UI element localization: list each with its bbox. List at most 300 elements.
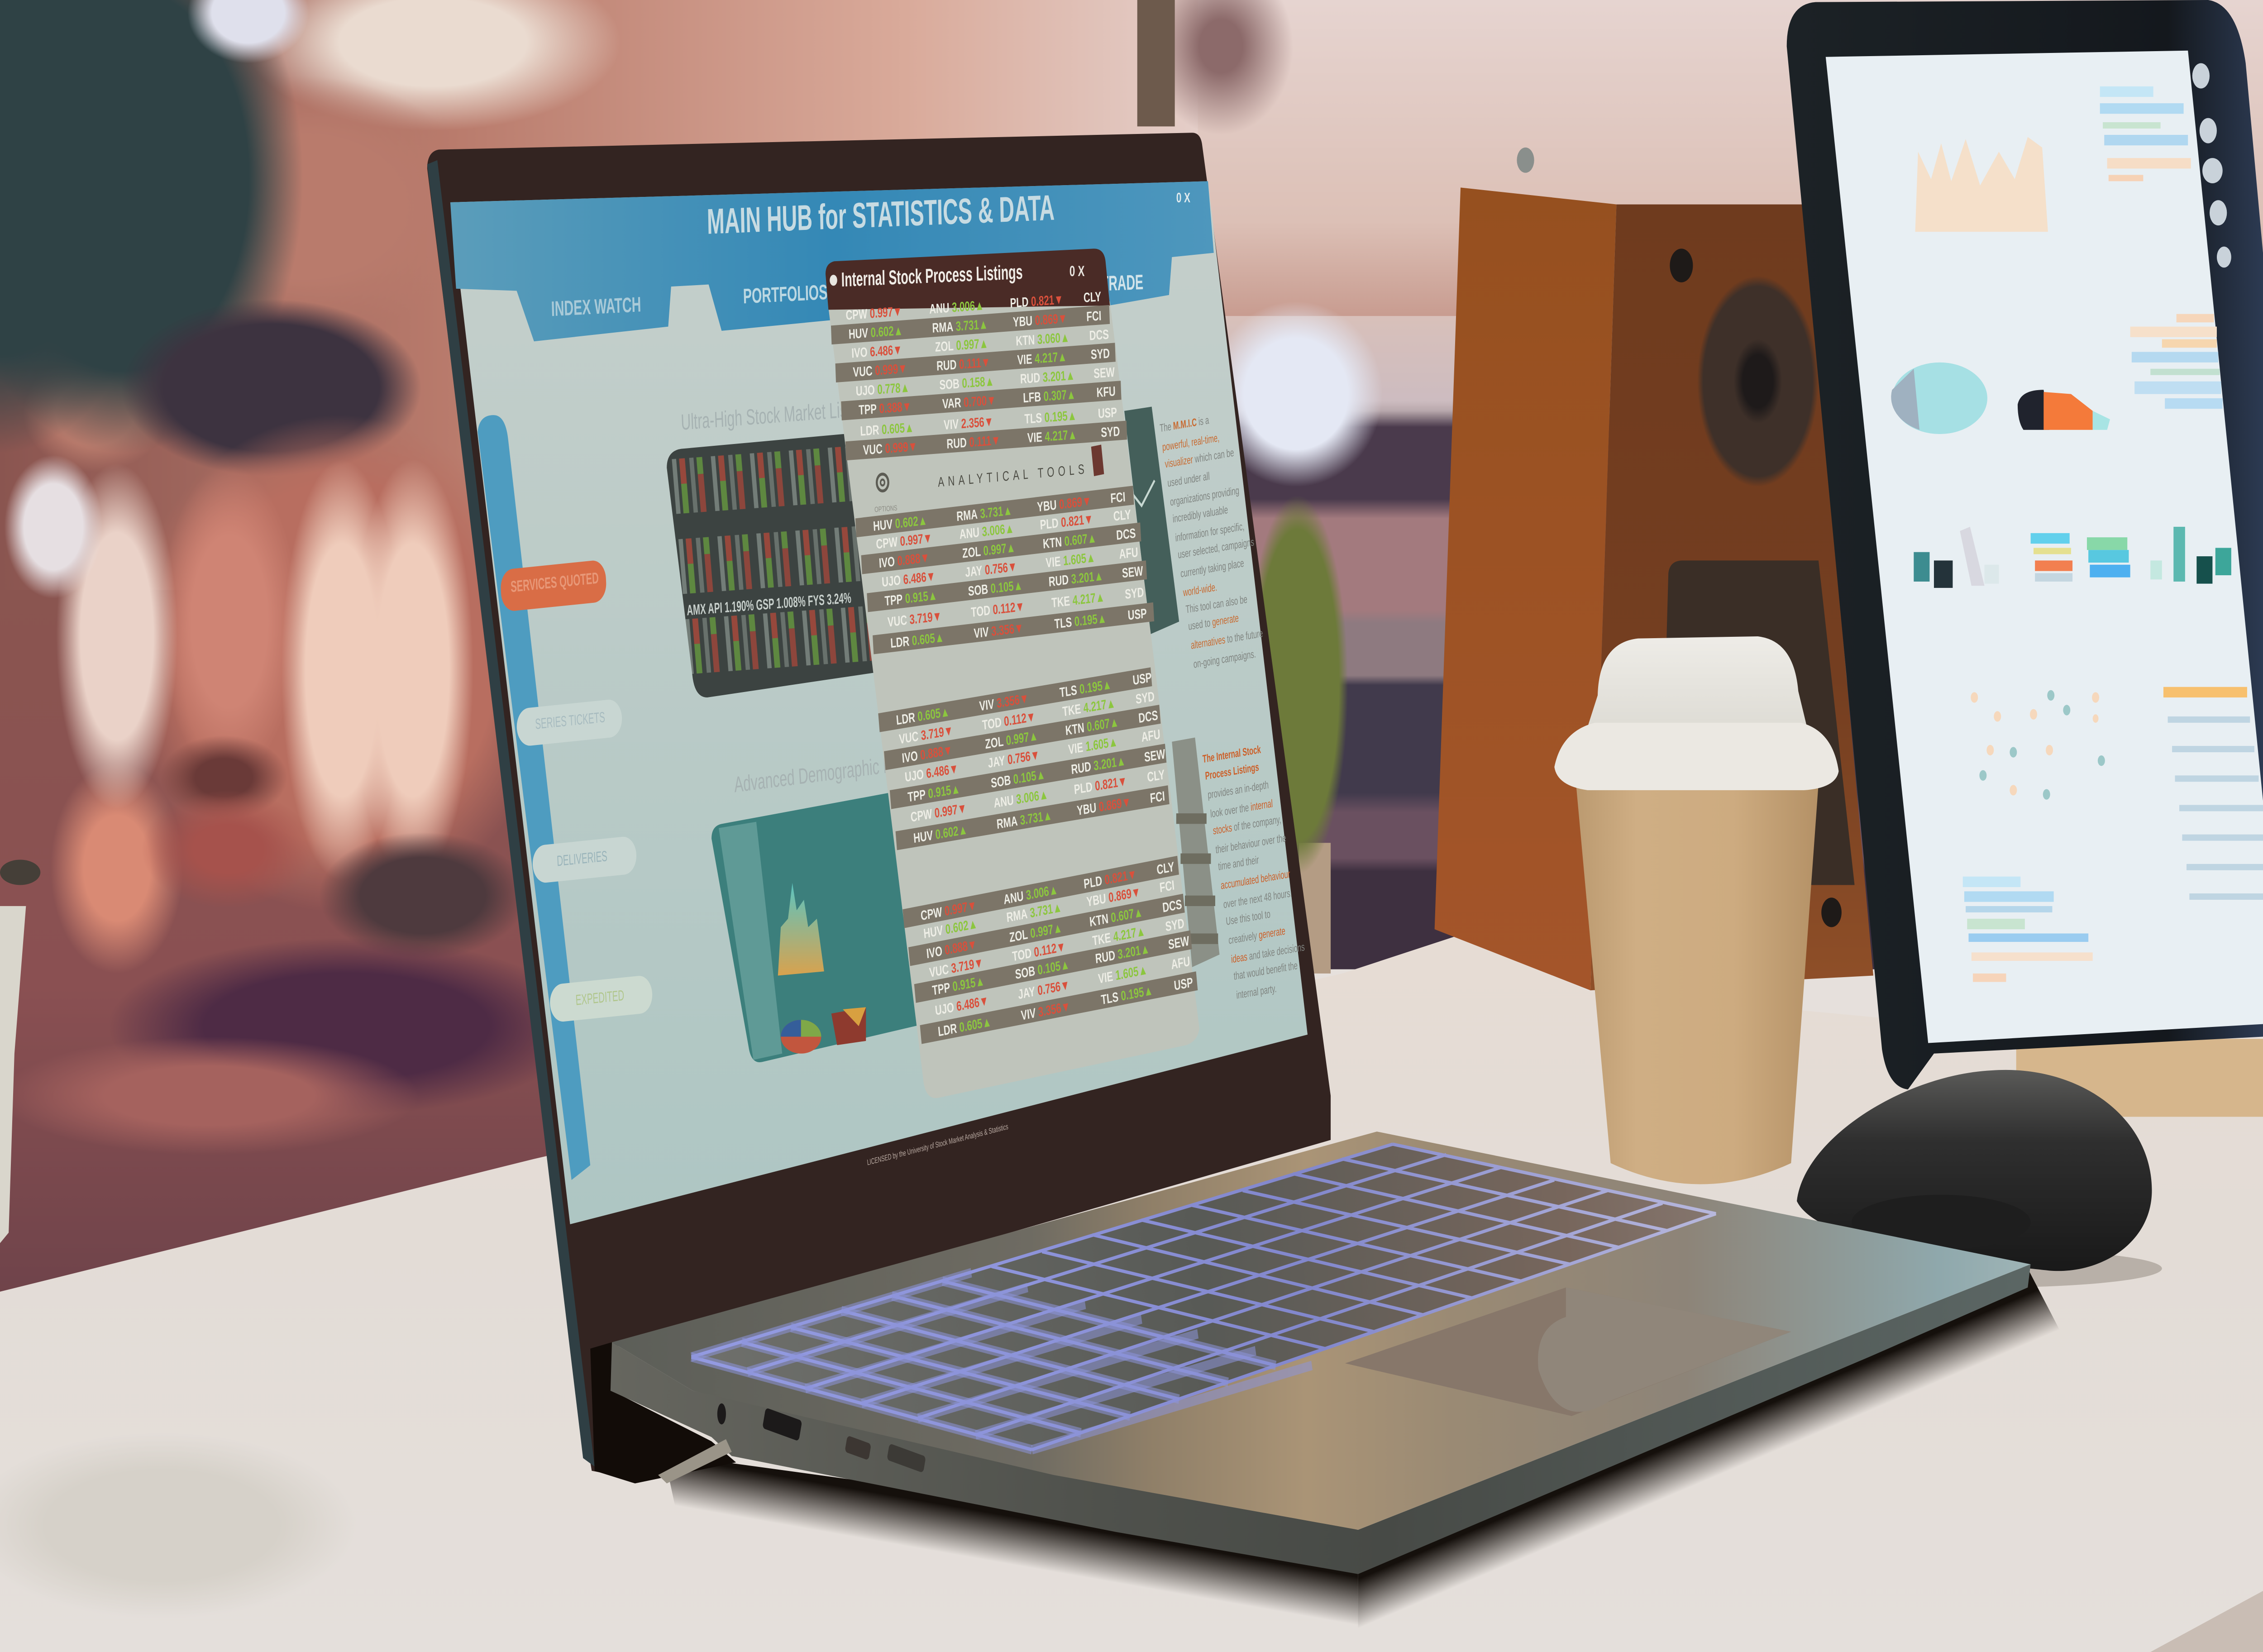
description text: bottom: their behaviour over the	[1215, 832, 1286, 856]
stock rows: block one: UJO	[855, 383, 875, 399]
desk reflection	[0, 1433, 357, 1619]
speaker woofer	[1660, 560, 1855, 885]
stock rows: block one: HUV	[848, 326, 869, 342]
stock rows: block two: FCI	[1110, 490, 1126, 506]
orange sidebar button: SERVICES QUOTED	[510, 569, 599, 596]
stock rows: block three: CPW	[910, 807, 933, 825]
stock rows: block three: SOB	[990, 773, 1012, 791]
stock rows: block two: JAY	[965, 563, 983, 580]
description text: bottom: that would benefit the	[1233, 960, 1298, 983]
stock rows: block four: 0.756▼	[1034, 978, 1070, 999]
small object at left edge	[0, 859, 40, 1243]
bezel copyright text: LICENSED by the University of Stock Market Analysis & Statistics	[867, 1122, 1009, 1167]
desk surface	[0, 936, 2263, 1652]
stock rows: block two: TOD	[971, 603, 991, 620]
stock listing dark panel	[667, 432, 892, 697]
stock rows: block four: VIV	[1020, 1006, 1036, 1023]
list with orange header	[2163, 687, 2263, 900]
stock rows: block three: 0.821▼	[1092, 773, 1127, 794]
stock rows: block two: 0.195▲	[1071, 611, 1107, 630]
stock rows: block two: HUV	[873, 517, 893, 534]
blurred background room	[0, 0, 2263, 1306]
stock rows: block two: 0.821▼	[1058, 512, 1093, 530]
cup body	[1576, 784, 1819, 1184]
heading: demographic info: Advanced Demographic Info	[733, 750, 907, 797]
row of small charts	[1914, 527, 2231, 588]
stock rows: block four: AFU	[1170, 954, 1191, 972]
stock rows: block two	[855, 486, 1154, 654]
stock rows: block three: 0.195▲	[1076, 677, 1112, 697]
description text: top: This tool can also be	[1185, 593, 1248, 616]
stock rows: block four: IVO	[926, 944, 943, 961]
description text: top: visualizer which can be	[1165, 447, 1234, 471]
description text: bottom: accumulated behaviour	[1220, 868, 1291, 892]
stock rows: block three: 0.869▼	[1096, 795, 1132, 815]
stock rows: block one: LDR	[860, 423, 879, 439]
description text: top: incredibly valuable	[1172, 504, 1228, 525]
stock rows: block three: 6.486▼	[923, 761, 959, 782]
colourful pie charts	[781, 1007, 866, 1054]
tab: portfolios: PORTFOLIOS	[743, 281, 828, 308]
side ports	[717, 1404, 926, 1473]
description text: top: world-wide.	[1182, 581, 1217, 599]
stock rows: block one: 0.869▼	[1032, 311, 1067, 329]
stock rows: block one: 0.602▲	[868, 323, 903, 340]
stock rows: block four: SOB	[1015, 964, 1036, 982]
stock rows: block four: RUD	[1095, 948, 1116, 967]
blue bar list bottom	[1963, 877, 2093, 982]
stock rows: block three: SYD	[1135, 689, 1155, 707]
stock rows: block two: 1.605▲	[1060, 550, 1096, 569]
stock rows: block four: 3.719▼	[948, 955, 984, 977]
stock rows: block one: 0.605▲	[879, 420, 914, 438]
stock rows: block three: 0.915▲	[925, 781, 961, 802]
stock rows: block three: CLY	[1146, 767, 1165, 785]
description text: top: powerful, real-time,	[1162, 432, 1220, 454]
stock rows: block one: CLY	[1084, 289, 1102, 306]
tablet on wooden stand	[1787, 0, 2263, 1117]
description text: bottom: The Internal Stock	[1202, 744, 1261, 765]
stock rows: block four: 3.006▲	[1023, 882, 1059, 903]
stock rows: block one: SEW	[1093, 365, 1115, 381]
stock rows: block three: FCI	[1150, 789, 1165, 806]
backlit key grid	[691, 1144, 1716, 1450]
stock rows: block one: SYD	[1101, 424, 1120, 440]
orange column chart	[1915, 137, 2048, 232]
small back panel with rows	[1172, 737, 1220, 967]
stock rows: block two: 0.112▼	[990, 599, 1025, 618]
stock rows: block two: AFU	[1119, 545, 1138, 562]
stock rows: block three: VIE	[1068, 740, 1084, 757]
stock rows: block two: KTN	[1042, 535, 1062, 552]
stock rows: block two: TPP	[884, 592, 903, 609]
description text: bottom: provides an in-depth	[1208, 779, 1269, 801]
stock rows: block three: 1.605▲	[1083, 734, 1118, 755]
stock rows: block one: TLS	[1024, 411, 1042, 427]
mouse scroll detail	[1852, 1195, 2031, 1250]
side icons	[2192, 63, 2231, 267]
stock rows: block two: SEW	[1122, 563, 1144, 581]
stock rows: block one: 0.195▲	[1041, 408, 1077, 425]
stock rows: block four: HUV	[923, 923, 944, 941]
tab: trade: TRADE	[1101, 271, 1144, 296]
description text: bottom: look over the internal	[1210, 798, 1273, 820]
description text: bottom: over the next 48 hours.	[1223, 887, 1293, 911]
stock rows: block one: VIE	[1027, 430, 1042, 446]
laptop screen	[450, 181, 1308, 1224]
heading: stock market listings: Ultra-High Stock Market Listings	[681, 395, 876, 435]
sidebar pill: three: EXPEDITED	[575, 987, 625, 1008]
popup controls: 0 X	[1069, 263, 1085, 279]
stock rows: block three: JAY	[988, 753, 1006, 771]
stock rows: block four: UJO	[935, 1000, 955, 1018]
stock rows: block two: 0.105▲	[988, 578, 1023, 597]
tablet body	[1787, 0, 2263, 1089]
stock rows: block three: YBU	[1076, 801, 1097, 818]
stock rows: block one: RMA	[932, 320, 954, 336]
stock rows: block two: 3.356▼	[988, 621, 1024, 640]
stock rows: block one: PLD	[1010, 295, 1029, 311]
stock rows: block one: VIV	[944, 417, 959, 433]
stock rows: block four: FCI	[1159, 878, 1175, 895]
description text: bottom: time and their	[1218, 854, 1259, 873]
cup reflection on touchpad	[1538, 1288, 1791, 1412]
stock rows: block four: 0.997▼	[941, 898, 977, 919]
hinge gap shadow	[590, 1342, 736, 1484]
stock rows: block four: PLD	[1083, 874, 1103, 892]
description text: top: alternatives to the future	[1190, 627, 1263, 652]
stock rows: block two: 3.719▼	[907, 609, 942, 628]
description text: top: used under all	[1167, 470, 1210, 489]
stock rows: block four: SYD	[1165, 916, 1185, 935]
stock rows: block one: DCS	[1089, 327, 1109, 344]
stock rows: block one: YBU	[1013, 314, 1033, 330]
stock rows: block three: RMA	[996, 814, 1018, 832]
stock rows: block four: 0.869▼	[1105, 884, 1141, 906]
black and orange 3D pie	[2018, 390, 2049, 430]
stock rows: block three: TLS	[1059, 683, 1078, 701]
stock rows: block four: JAY	[1017, 984, 1036, 1002]
stock rows: block four: 4.217▲	[1110, 924, 1146, 945]
sidebar pill: one	[516, 698, 623, 747]
stock rows: block one: 0.700▼	[961, 393, 996, 410]
stock rows: block one: 0.111▼	[956, 355, 991, 372]
stock rows: block four: 0.602▲	[942, 917, 978, 938]
wooden speaker	[1435, 187, 1873, 990]
stock rows: block three: 3.719▼	[918, 723, 954, 744]
stock rows: block three: AFU	[1141, 727, 1161, 745]
stock rows: block four: DCS	[1162, 897, 1183, 916]
touchpad	[1345, 1288, 1791, 1416]
stock rows: block two: 0.997▼	[897, 530, 933, 549]
desk front edge corner	[2150, 1591, 2263, 1652]
stock rows: block four: USP	[1174, 975, 1194, 993]
stock rows: block three: UJO	[904, 767, 924, 785]
stock rows: block three: VUC	[898, 729, 919, 747]
stock rows: block one: VUC	[863, 442, 883, 458]
description text: top: on-going campaigns.	[1193, 648, 1256, 671]
stock rows: block four: TLS	[1100, 990, 1119, 1007]
analytical tools label: ANALYTICAL TOOLS	[938, 462, 1089, 490]
stock rows: block three: 0.105▲	[1010, 767, 1046, 788]
stock rows: block one: 4.217▲	[1042, 427, 1077, 444]
stock rows: block one: IVO	[851, 345, 868, 361]
stock rows: block two: 0.997▲	[980, 540, 1016, 559]
stock rows: block three: 3.356▼	[993, 691, 1029, 711]
stock rows: block three	[878, 667, 1170, 850]
description text: top: currently taking place	[1180, 557, 1244, 580]
stock rows: block one: 0.997▼	[867, 304, 902, 321]
stock rows: block two: IVO	[878, 554, 895, 571]
stock rows: block four: VUC	[929, 962, 950, 980]
description text: bottom: internal party.	[1236, 983, 1277, 1002]
bar histogram	[778, 883, 824, 976]
panel mid label strip: AMX API 1.190% GSP 1.008% FYS 3.24%	[687, 589, 851, 619]
stock rows: block three: 3.006▲	[1013, 787, 1049, 807]
stock rows: block one: CPW	[845, 306, 868, 323]
stock rows: block four: ZOL	[1009, 927, 1028, 945]
stock rows: block two: LDR	[890, 634, 910, 651]
stock rows: block three: 0.112▼	[1001, 709, 1036, 730]
stock rows: block two: TKE	[1051, 594, 1070, 611]
cyan 3D pie	[1892, 363, 1987, 434]
stock rows: block three: 3.731▲	[1017, 808, 1053, 828]
stock rows: block one: RUD	[936, 358, 957, 374]
stock rows: block two: USP	[1127, 606, 1147, 623]
stock rows: block three: TOD	[982, 715, 1002, 733]
stock rows: block four: LDR	[937, 1021, 958, 1040]
stock rows: block four: RMA	[1006, 907, 1028, 925]
computer mouse	[1797, 1070, 2162, 1288]
stock rows: block three: 0.888▼	[917, 743, 953, 763]
stock rows: block three: KTN	[1065, 721, 1085, 738]
stock rows: block two: 0.869▼	[1056, 494, 1092, 512]
laptop deck top	[612, 1132, 2031, 1530]
stock rows: block two: VUC	[887, 613, 907, 630]
stock rows: block one: SOB	[939, 377, 960, 393]
stock rows: block one: 0.307▲	[1041, 387, 1076, 404]
stock rows: block two: 0.756▼	[982, 559, 1017, 578]
sidebar pill: three	[549, 974, 653, 1023]
laptop	[427, 133, 2031, 1574]
stock rows: block two: 4.217▲	[1069, 590, 1105, 608]
description text: bottom: creatively generate	[1228, 925, 1286, 947]
stock rows: block two: 0.602▲	[892, 513, 928, 532]
stock rows: block one: 0.999▼	[882, 439, 917, 456]
stock rows: block one: 0.111▼	[966, 433, 1001, 450]
stock rows: block four: TPP	[931, 980, 951, 998]
hinge highlight	[658, 1439, 732, 1484]
orange and blue bar list	[2130, 314, 2223, 409]
stock rows: block two: 0.605▲	[909, 630, 945, 649]
stock rows: block three: RUD	[1070, 759, 1092, 777]
window controls: 0 X	[1176, 191, 1191, 205]
stock rows: block one: VUC	[853, 364, 873, 380]
stock rows: block one: ZOL	[935, 339, 954, 355]
description text: bottom: Use this tool to	[1226, 908, 1271, 928]
popup title: Internal Stock Process Listings	[841, 261, 1023, 291]
gear icon	[877, 474, 888, 491]
stock rows: block one: 3.006▲	[949, 298, 984, 315]
stock rows: block three: 4.217▲	[1080, 696, 1116, 716]
stock rows: block three: 3.201▲	[1090, 754, 1126, 774]
stock rows: block one: RUD	[1020, 371, 1041, 387]
stock rows: block one: TPP	[859, 402, 877, 418]
sidebar pill: two	[532, 836, 637, 884]
speaker screw holes	[1670, 248, 1842, 927]
stock rows: block three: ANU	[993, 793, 1014, 811]
stock rows: block four	[902, 856, 1198, 1044]
stock rows: block one: KFU	[1096, 384, 1116, 400]
scatter plot dots	[1971, 690, 2105, 800]
stock rows: block one: 0.158▲	[959, 374, 994, 391]
stock rows: block three: 0.602▲	[932, 822, 968, 843]
stock rows: block two: UJO	[881, 573, 901, 590]
demographic teal panel	[711, 793, 924, 1062]
blue bar list top	[2100, 86, 2191, 181]
stock rows: block four: SEW	[1168, 934, 1190, 952]
stock rows: block three: TKE	[1062, 702, 1081, 719]
description text: bottom	[1202, 744, 1305, 1002]
description text: top: user selected, campaigns	[1178, 536, 1255, 561]
stock rows: block three: DCS	[1138, 708, 1159, 726]
panel side stripes	[719, 822, 782, 1060]
dashboard layer	[450, 181, 1214, 1180]
stock rows: block four: 3.731▲	[1027, 900, 1063, 921]
stock rows: block two: 0.888▼	[894, 550, 930, 569]
stock rows: block four: 0.607▲	[1108, 905, 1144, 926]
stock rows: block four: 0.605▲	[956, 1014, 992, 1036]
speaker tweeter	[1697, 276, 1819, 487]
stock rows: block one: 0.388▼	[876, 399, 912, 416]
popup body	[828, 301, 1199, 1098]
left sidebar	[477, 415, 590, 1180]
stock rows: block one: LFB	[1023, 390, 1041, 406]
stock rows: block three: ZOL	[984, 734, 1004, 752]
stock rows: block two: SOB	[968, 582, 988, 599]
stock rows: block one: USP	[1098, 405, 1117, 421]
stock rows: block four: TOD	[1012, 946, 1032, 964]
stock rows: block four: CPW	[920, 905, 943, 923]
stock rows: block one: FCI	[1086, 309, 1102, 325]
stock rows: block three: TPP	[907, 787, 926, 805]
stock rows: block four: VIE	[1098, 969, 1114, 987]
stock rows: block four: 0.821▼	[1102, 867, 1137, 888]
description text: bottom: Process Listings	[1205, 761, 1259, 783]
description text: top: organizations providing	[1170, 485, 1240, 508]
stock rows: block four: 0.915▲	[950, 974, 985, 995]
stock rows: block two: PLD	[1040, 516, 1059, 533]
analytical tools strip	[874, 444, 1104, 514]
stock rows: block two: 3.731▲	[977, 503, 1012, 522]
stock rows: block four: 0.997▲	[1027, 920, 1063, 942]
stock rows: block four: 3.356▼	[1035, 999, 1071, 1020]
laptop shadow	[664, 1269, 2064, 1635]
keyboard	[691, 1144, 1716, 1450]
title: MAIN HUB for STATISTICS & DATA	[707, 187, 1055, 242]
description text: top: The M.M.I.C is a	[1160, 414, 1210, 434]
key glow on near side	[691, 1273, 1312, 1450]
stock rows: block three: 0.607▲	[1084, 715, 1119, 735]
stock rows: block two: 3.006▲	[979, 521, 1014, 540]
stock rows: block one: 3.201▲	[1040, 368, 1075, 385]
stock rows: block one: 4.217▲	[1032, 349, 1067, 367]
dark green chart panel	[1124, 407, 1179, 634]
stock rows: block four: 3.201▲	[1114, 941, 1151, 963]
stock rows: block two: 3.201▲	[1068, 568, 1104, 587]
small labels: OPTIONS	[874, 503, 898, 514]
laptop deck front edge	[611, 1264, 2031, 1574]
potted plant	[1247, 495, 1348, 974]
description text: top: used to generate	[1188, 612, 1239, 633]
stock rows: block one: 0.999▼	[872, 361, 907, 378]
description text: top	[1160, 414, 1263, 671]
stock rows: block four: KTN	[1089, 912, 1109, 930]
stock rows: block one: 0.778▲	[874, 380, 910, 397]
stock rows: block one: RUD	[946, 435, 967, 452]
stock rows: block two: ANU	[959, 525, 980, 542]
sidebar pill: two: DELIVERIES	[556, 848, 608, 869]
stock rows: block four: YBU	[1086, 891, 1107, 910]
stock rows: block one: 3.060▲	[1035, 330, 1070, 348]
cup lid	[1554, 636, 1838, 790]
paper coffee cup	[1554, 636, 1838, 1184]
stock rows: block two: YBU	[1037, 498, 1057, 515]
stock rows: block one: 6.486▼	[867, 343, 902, 360]
stock rows: block three: 0.997▼	[931, 801, 967, 821]
stock rows: block four: 1.605▲	[1112, 962, 1148, 984]
stock rows: block two: 0.915▲	[902, 588, 938, 606]
stock rows: block four: CLY	[1156, 859, 1175, 878]
stock rows: block three: HUV	[913, 828, 933, 846]
stock rows: block one: 3.731▲	[953, 317, 988, 334]
stock rows: block one: VIE	[1017, 352, 1032, 368]
stock rows: block two: VIV	[974, 625, 989, 641]
stock rows: block two: VIE	[1046, 554, 1061, 571]
stock rows: block one: ANU	[929, 301, 950, 317]
laptop lid	[427, 133, 1331, 1479]
wooden stand	[2016, 1039, 2263, 1117]
stock rows: block one: 0.821▼	[1028, 292, 1064, 310]
stock rows: block three: 0.997▲	[1003, 728, 1039, 749]
stock rows: block three: LDR	[896, 710, 916, 728]
stock rows: block four: 0.888▼	[941, 937, 978, 958]
stock rows: block three: VIV	[979, 697, 995, 714]
tablet screen	[1826, 51, 2263, 1043]
stock rows: block one: 0.997▲	[953, 336, 988, 353]
stock rows: block one: 2.356▼	[959, 414, 993, 432]
stock rows: block one: KTN	[1016, 333, 1035, 349]
description text: bottom: stocks of the company,	[1213, 814, 1281, 837]
stock rows: block two: ZOL	[962, 544, 981, 561]
lid left edge	[427, 160, 595, 1466]
orange sidebar button	[500, 559, 607, 612]
description text: bottom: ideas and take decisions	[1231, 941, 1305, 966]
description text: top: information for specific,	[1175, 520, 1245, 544]
stock rows: block four: 0.105▲	[1034, 957, 1070, 979]
stock rows: block two: 0.607▲	[1061, 530, 1097, 549]
stock rows: block four: 6.486▼	[953, 993, 989, 1015]
red document icon	[1091, 444, 1104, 476]
stock rows: block two: RUD	[1048, 573, 1069, 590]
blue header with tabs	[450, 181, 1214, 341]
popup: internal stock process listings	[826, 248, 1199, 1098]
stock rows: block two: SYD	[1125, 585, 1144, 602]
stock rows: block two: CPW	[876, 535, 898, 552]
stock rows: block four: TKE	[1092, 931, 1112, 949]
stock rows: block one: VAR	[942, 396, 961, 412]
stock rows: block one: SYD	[1090, 346, 1110, 363]
